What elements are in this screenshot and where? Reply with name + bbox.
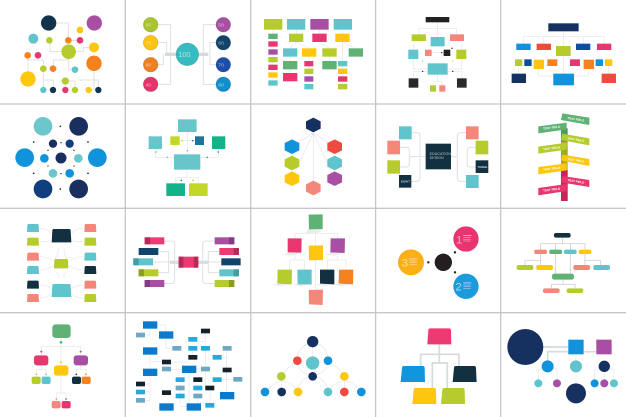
panel: trapezoid box tree xyxy=(401,328,477,404)
panel: dark square mind map: THREE xyxy=(477,165,487,169)
panel: three numbered circles: 3 xyxy=(402,258,408,270)
panel: dark square mind map: EIGHT xyxy=(401,179,410,183)
panel: ribbon signpost: TEXT FIELD xyxy=(543,125,561,131)
panel: dark square mind map: EDUCATIONAL xyxy=(430,152,455,156)
panel: sticky note flowchart xyxy=(272,214,353,305)
panel: percentage circles flowchart: 80 xyxy=(218,82,224,88)
panel: percentage circles flowchart: 70 xyxy=(218,63,224,69)
panel: three-node schemes with side boxes xyxy=(27,224,96,302)
panel: ribbon signpost: TEXT FIELD xyxy=(567,178,585,185)
panel: ribbon signpost xyxy=(538,113,589,201)
panel: dark square mind map: DESIGN xyxy=(430,156,444,160)
panel: ribbon signpost: TEXT FIELD xyxy=(567,157,585,164)
panel: blue circle cluster xyxy=(15,117,107,198)
panel: ribbon signpost: TEXT FIELD xyxy=(543,165,561,172)
panel: three numbered circles xyxy=(398,226,479,299)
panel: ribbon signpost: TEXT FIELD xyxy=(567,136,585,143)
panel: complex blue network flowchart xyxy=(136,321,242,411)
panel: circle pyramid tree xyxy=(261,336,366,396)
panel: percentage circles flowchart: 70 xyxy=(146,41,151,47)
panel: hexagon flowchart xyxy=(285,118,342,195)
panel: rounded box tree xyxy=(32,324,91,408)
panel: folded ribbon mind map xyxy=(133,237,241,287)
panel: percentage circles flowchart: 60 xyxy=(146,23,151,29)
panel: percentage circles flowchart: 50 xyxy=(218,23,224,29)
panel: pill organisation chart xyxy=(517,233,610,293)
panel: three numbered circles: 2 xyxy=(455,282,462,294)
panel: teal and green box flowchart xyxy=(149,119,225,196)
panel: circle network flowchart xyxy=(20,15,102,93)
panel: percentage circles flowchart: 80 xyxy=(146,63,151,69)
panel: percentage circles flowchart xyxy=(143,17,231,92)
panel: three numbered circles: 1 xyxy=(456,234,462,246)
panel: family tree circles and squares xyxy=(507,329,618,403)
panel: ribbon signpost: TEXT FIELD xyxy=(567,116,585,123)
panel: dark square mind map xyxy=(387,126,488,188)
panel: navy header multi-colour flowchart xyxy=(512,23,616,85)
panel: ribbon signpost: TEXT FIELD xyxy=(543,145,561,151)
panel: ribbon signpost: TEXT FIELD xyxy=(543,186,561,193)
panel: black header flowchart xyxy=(408,17,467,92)
panel: percentage circles flowchart: 60 xyxy=(218,41,224,47)
panel: percentage circles flowchart: 100 xyxy=(178,50,191,59)
panel: column box flowchart xyxy=(264,19,363,89)
panel: percentage circles flowchart: 40 xyxy=(146,82,151,88)
